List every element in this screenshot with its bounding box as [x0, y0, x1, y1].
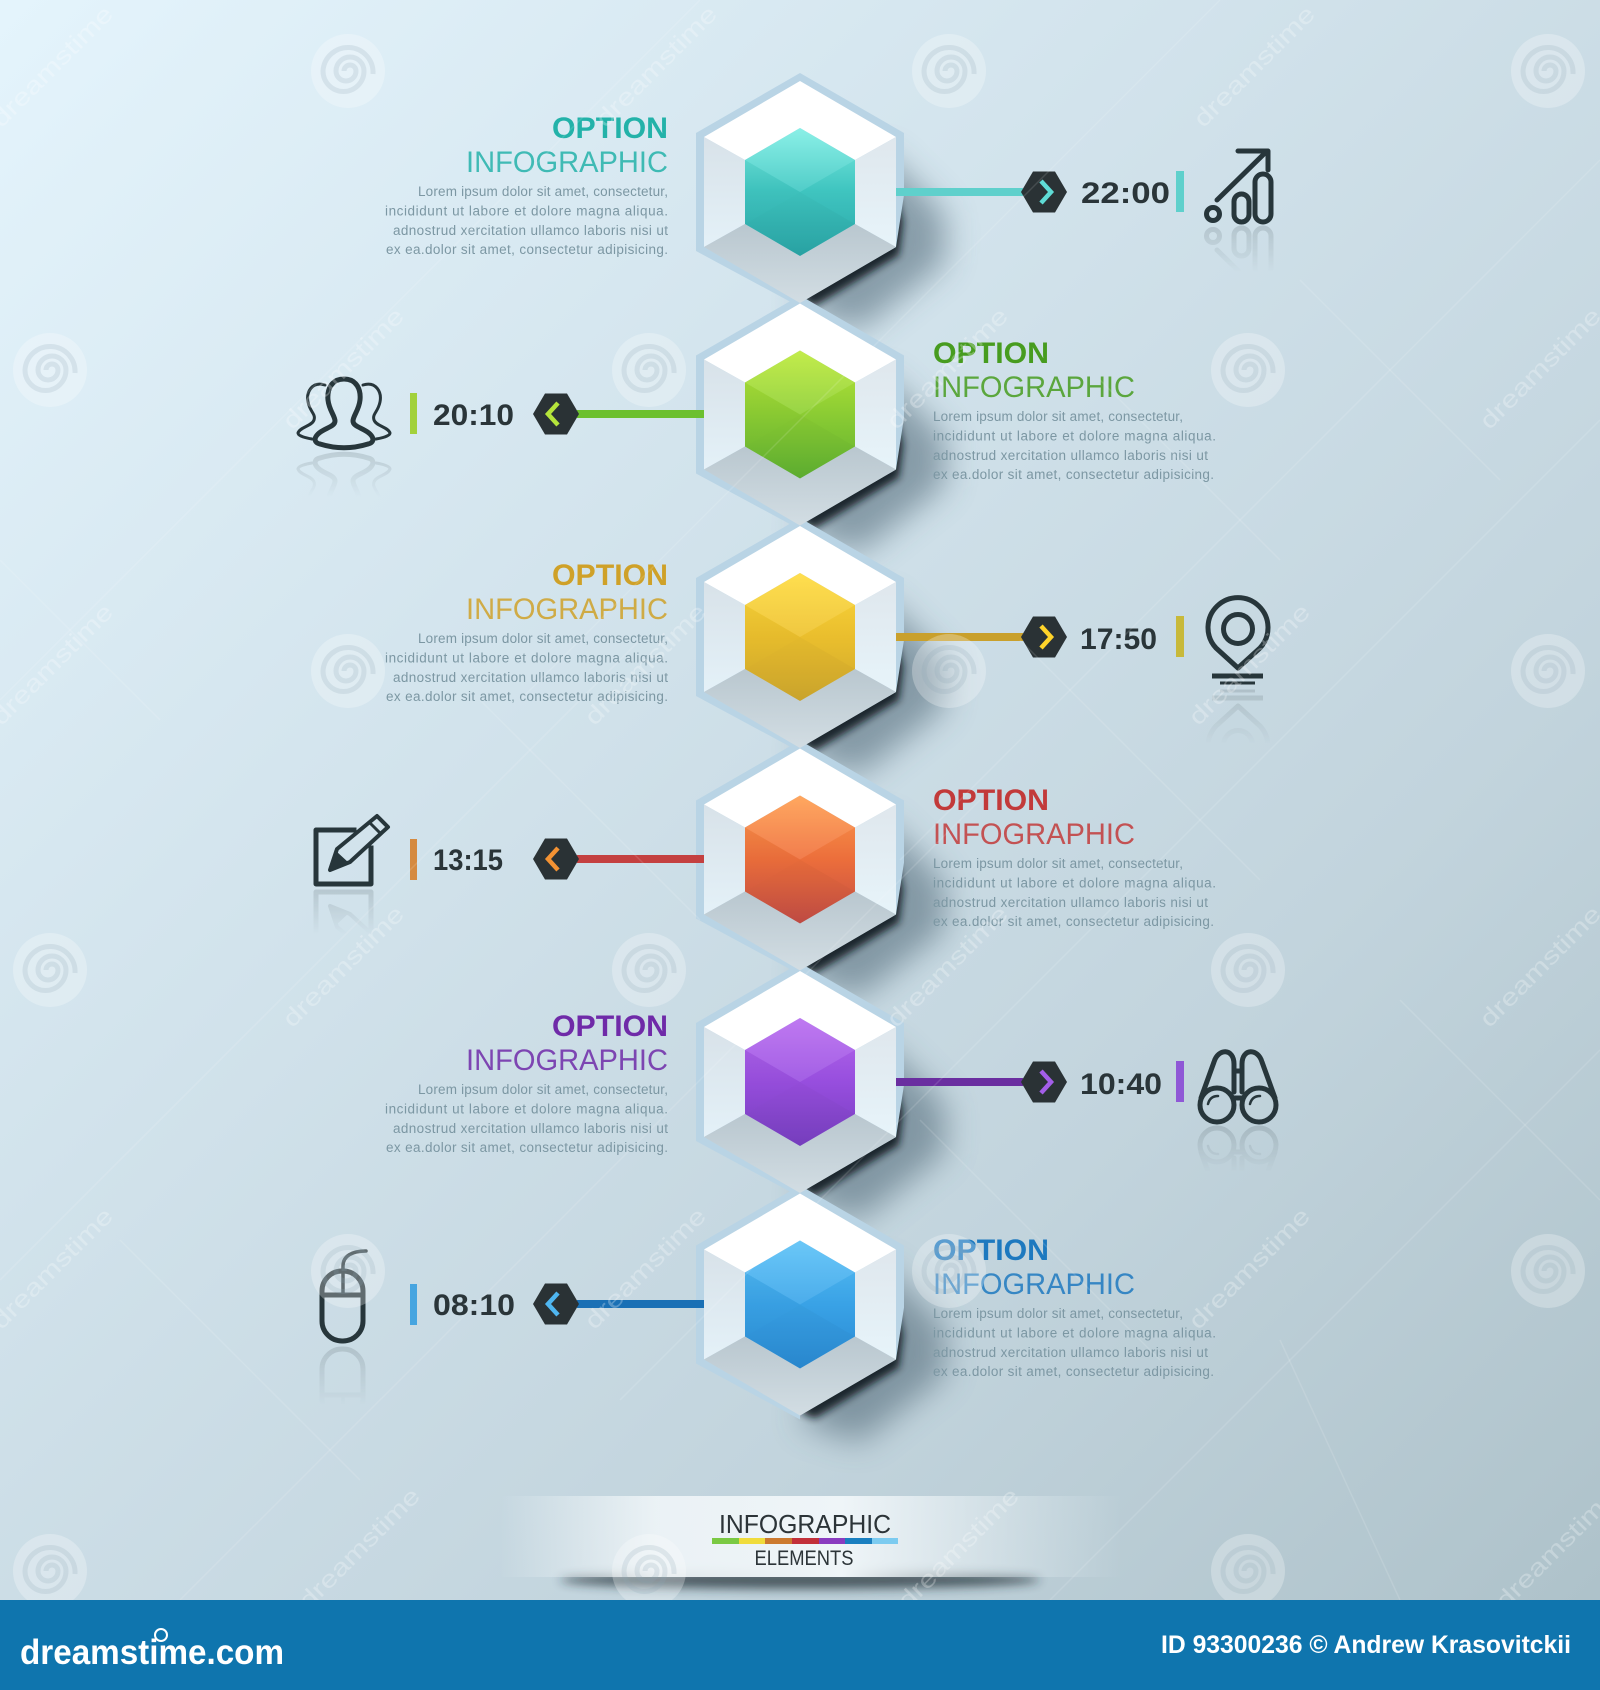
panel: option 3 — [386, 526, 1270, 748]
icon: computer mouse — [320, 1249, 368, 1386]
watermark text: dreamstime — [278, 901, 410, 1033]
connector with badge — [896, 616, 1067, 658]
text block: adnostrud xercitation ullamco laboris nisi ut — [393, 223, 668, 238]
text block: OPTION — [933, 1234, 1049, 1267]
text block: incididunt ut labore et dolore magna aliqua. — [933, 1326, 1216, 1340]
text block: Lorem ipsum dolor sit amet, consectetur, — [418, 184, 668, 199]
text block: ex ea.dolor sit amet, consectetur adipisicing. — [386, 689, 668, 704]
panel: option 2 — [298, 304, 1216, 526]
icon: binoculars — [1198, 1049, 1278, 1157]
watermark text: dreamstime — [893, 1483, 1025, 1615]
text block: OPTION — [933, 784, 1049, 817]
text block: ex ea.dolor sit amet, consectetur adipisicing. — [933, 467, 1214, 482]
connector with badge — [533, 394, 704, 434]
hexagon shadows and frames — [696, 73, 945, 1442]
text block — [933, 1234, 1216, 1379]
footer bar — [0, 1600, 1600, 1690]
accent bar — [1176, 616, 1184, 657]
watermark text: dreamstime — [580, 599, 712, 731]
watermark text: dreamstime — [1184, 1203, 1316, 1335]
text block: incididunt ut labore et dolore magna aliqua. — [933, 428, 1216, 444]
text block — [933, 784, 1216, 929]
text block: INFOGRAPHIC — [933, 371, 1135, 404]
footer logo: dreamstime.com — [20, 1633, 284, 1672]
watermark text: dreamstime — [1475, 303, 1600, 435]
accent bar — [410, 839, 417, 880]
time: 13:15 — [433, 844, 503, 877]
text block — [385, 559, 668, 704]
accent bar — [410, 393, 417, 434]
text block — [385, 1010, 668, 1155]
text block: ex ea.dolor sit amet, consectetur adipisicing. — [386, 1140, 668, 1155]
panel: option 5 — [385, 971, 1276, 1198]
footer logo spiral — [155, 1629, 167, 1641]
bottom label: infographic elements — [500, 1496, 1122, 1589]
time: 10:40 — [1080, 1068, 1162, 1101]
watermark text: dreamstime — [1491, 1483, 1600, 1615]
bottom label: infographic elements: INFOGRAPHIC — [719, 1509, 891, 1539]
icon: people — [296, 376, 392, 484]
watermark text: dreamstime — [278, 303, 410, 435]
watermark text: dreamstime — [882, 303, 1014, 435]
text block: OPTION — [552, 1010, 668, 1043]
hexagon: purple cube — [704, 971, 896, 1193]
text block: INFOGRAPHIC — [466, 593, 668, 626]
text block: incididunt ut labore et dolore magna aliqua. — [385, 204, 668, 218]
icon: map pin — [1206, 595, 1270, 726]
text block: Lorem ipsum dolor sit amet, consectetur, — [933, 1306, 1183, 1321]
watermark text: dreamstime — [882, 901, 1014, 1033]
watermark text: dreamstime — [1475, 901, 1600, 1033]
text block: incididunt ut labore et dolore magna aliqua. — [385, 1102, 668, 1116]
connector with badge — [533, 838, 704, 880]
accent bar — [410, 1284, 417, 1325]
text block: adnostrud xercitation ullamco laboris nisi ut — [393, 670, 668, 685]
icon: growth chart — [1204, 148, 1274, 258]
accent bar — [1176, 1061, 1184, 1102]
connector with badge — [896, 1062, 1067, 1102]
hexagon: yellow cube — [704, 526, 896, 748]
connector with badge — [533, 1284, 704, 1324]
watermark text: dreamstime — [294, 1483, 426, 1615]
footer credit: ID 93300236 © Andrew Krasovitckii — [1161, 1631, 1571, 1659]
connector with badge — [896, 172, 1067, 212]
text block: incididunt ut labore et dolore magna aliqua. — [933, 876, 1216, 890]
watermark text: dreamstime — [1189, 1, 1321, 133]
bottom label: infographic elements: ELEMENTS — [754, 1547, 854, 1570]
text block: adnostrud xercitation ullamco laboris nisi ut — [933, 448, 1208, 463]
panel: option 1 — [385, 81, 1271, 303]
text block: ex ea.dolor sit amet, consectetur adipisicing. — [933, 1364, 1214, 1379]
text block: OPTION — [552, 112, 668, 145]
watermark text: dreamstime — [591, 1, 723, 133]
hexagon: green cube — [704, 304, 896, 526]
text block: Lorem ipsum dolor sit amet, consectetur, — [418, 1082, 668, 1097]
text block — [933, 337, 1216, 482]
text block: OPTION — [552, 559, 668, 592]
icon: edit pencil — [314, 814, 390, 922]
time: 08:10 — [433, 1289, 515, 1322]
hexagon: blue cube — [704, 1194, 896, 1416]
time: 22:00 — [1081, 177, 1170, 210]
text block: INFOGRAPHIC — [466, 1044, 668, 1077]
text block: adnostrud xercitation ullamco laboris nisi ut — [933, 895, 1208, 910]
panel: option 4 — [316, 748, 1216, 970]
watermark text: dreamstime — [1184, 599, 1316, 731]
time: 17:50 — [1080, 623, 1157, 656]
text block: adnostrud xercitation ullamco laboris nisi ut — [393, 1121, 668, 1136]
text block: incididunt ut labore et dolore magna aliqua. — [385, 650, 668, 666]
accent bar — [1176, 171, 1184, 212]
text block: INFOGRAPHIC — [933, 818, 1135, 851]
text block: ex ea.dolor sit amet, consectetur adipisicing. — [933, 914, 1214, 929]
panel: option 6 — [322, 1194, 1216, 1439]
text block — [385, 112, 668, 257]
text block: INFOGRAPHIC — [933, 1268, 1135, 1301]
text block: ex ea.dolor sit amet, consectetur adipisicing. — [386, 242, 668, 257]
hexagon: teal cube — [704, 81, 896, 303]
text block: INFOGRAPHIC — [466, 146, 668, 179]
text block: Lorem ipsum dolor sit amet, consectetur, — [933, 409, 1183, 424]
text block: Lorem ipsum dolor sit amet, consectetur, — [418, 631, 668, 646]
hexagon: orange cube — [704, 748, 896, 970]
text block: adnostrud xercitation ullamco laboris nisi ut — [933, 1345, 1208, 1360]
time: 20:10 — [433, 399, 514, 432]
watermark text: dreamstime — [580, 1203, 712, 1335]
text block: OPTION — [933, 337, 1049, 370]
text block: Lorem ipsum dolor sit amet, consectetur, — [933, 856, 1183, 871]
